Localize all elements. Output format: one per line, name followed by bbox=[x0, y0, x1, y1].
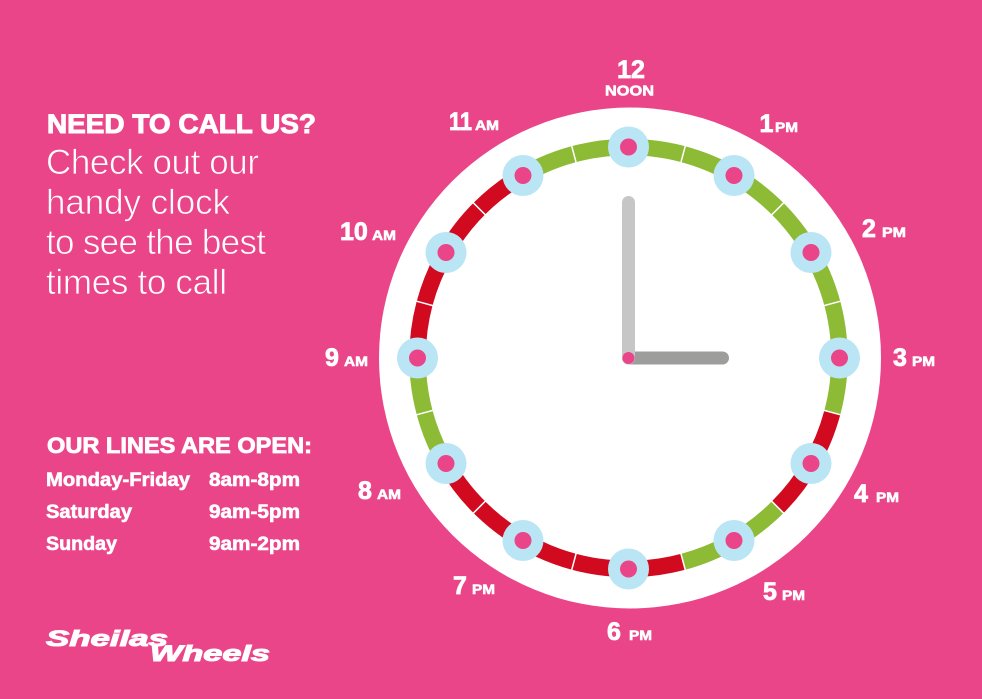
table: opening hours: 8am-8pm bbox=[209, 470, 300, 491]
label: 4pm: PM bbox=[876, 489, 899, 505]
segment: 9am to 11am red bbox=[418, 175, 523, 358]
half-hour ticks bbox=[416, 146, 840, 570]
label: 11am: AM bbox=[475, 117, 499, 133]
clock pivot bbox=[622, 352, 634, 364]
label: 3pm: PM bbox=[912, 353, 935, 369]
label: 3pm bbox=[893, 344, 935, 372]
text block: clock intro: Check out our bbox=[46, 143, 259, 182]
heading: need to call us: NEED TO CALL US? bbox=[47, 109, 316, 139]
table: opening hours: Saturday bbox=[46, 502, 132, 523]
text block: clock intro: to see the best bbox=[46, 223, 266, 262]
clock face bbox=[379, 108, 881, 608]
table: opening hours bbox=[46, 470, 300, 555]
label: 2pm: PM bbox=[882, 224, 906, 240]
table: opening hours: 9am-2pm bbox=[209, 534, 300, 555]
label: 2pm bbox=[862, 215, 906, 243]
minute hand bbox=[622, 202, 635, 358]
label: 9am: 9 bbox=[325, 344, 339, 372]
label: 12 noon: 12 bbox=[617, 56, 645, 84]
label: 1pm bbox=[760, 110, 798, 138]
label: 7pm: PM bbox=[472, 581, 495, 597]
label: 4pm: 4 bbox=[854, 480, 868, 508]
segment: 5:30pm to 8pm red bbox=[446, 464, 683, 569]
label: 11am: 11 bbox=[449, 108, 472, 136]
label: 7pm: 7 bbox=[453, 572, 467, 600]
label: 10am: 10 bbox=[340, 218, 368, 246]
label: 10am bbox=[340, 218, 396, 246]
logo: Sheilas Wheels bbox=[46, 626, 270, 666]
label: 6pm: PM bbox=[629, 627, 652, 643]
text block: clock intro: handy clock bbox=[46, 183, 230, 222]
text block: clock intro bbox=[46, 143, 266, 302]
hour hand bbox=[628, 352, 722, 364]
label: 10am: AM bbox=[372, 227, 396, 243]
label: 5pm: 5 bbox=[763, 578, 777, 606]
label: 12 noon bbox=[605, 56, 654, 100]
label: 6pm: 6 bbox=[607, 618, 621, 646]
label: 3pm: 3 bbox=[893, 344, 907, 372]
text block: clock intro: times to call bbox=[46, 263, 227, 302]
hour markers bbox=[397, 126, 860, 590]
label: 2pm: 2 bbox=[862, 215, 876, 243]
label: 8am: 8 bbox=[358, 477, 372, 505]
segment: 11am to 3:30pm green bbox=[523, 147, 839, 413]
label: 9am: AM bbox=[344, 353, 368, 369]
heading: our lines are open: OUR LINES ARE OPEN: bbox=[47, 433, 312, 458]
logo: Sheilas Wheels: Wheels bbox=[150, 641, 270, 666]
table: opening hours: Monday-Friday bbox=[46, 470, 190, 491]
label: 6pm bbox=[607, 618, 652, 646]
label: 8am bbox=[358, 477, 401, 505]
label: 1pm: PM bbox=[775, 119, 798, 135]
label: 5pm bbox=[763, 578, 805, 606]
logo: Sheilas Wheels: Sheilas bbox=[46, 626, 168, 651]
label: 11am bbox=[449, 108, 499, 136]
ring: call-time segments bbox=[418, 147, 839, 569]
label: 5pm: PM bbox=[782, 587, 805, 603]
label: 8am: AM bbox=[377, 486, 401, 502]
clock hands bbox=[628, 202, 722, 358]
table: opening hours: 9am-5pm bbox=[209, 502, 300, 523]
label: 7pm bbox=[453, 572, 495, 600]
label: 4pm bbox=[854, 480, 899, 508]
label: 12 noon: NOON bbox=[605, 82, 654, 100]
label: 9am bbox=[325, 344, 368, 372]
segment: 4:30pm to 5:30pm green bbox=[683, 507, 778, 562]
hour marker centres bbox=[409, 138, 848, 578]
segment: 3:30pm to 4:30pm red bbox=[778, 413, 832, 507]
segment: 8am to 9am green bbox=[418, 358, 446, 464]
label: 1pm: 1 bbox=[760, 110, 774, 138]
hour labels bbox=[325, 56, 935, 646]
table: opening hours: Sunday bbox=[46, 534, 117, 555]
